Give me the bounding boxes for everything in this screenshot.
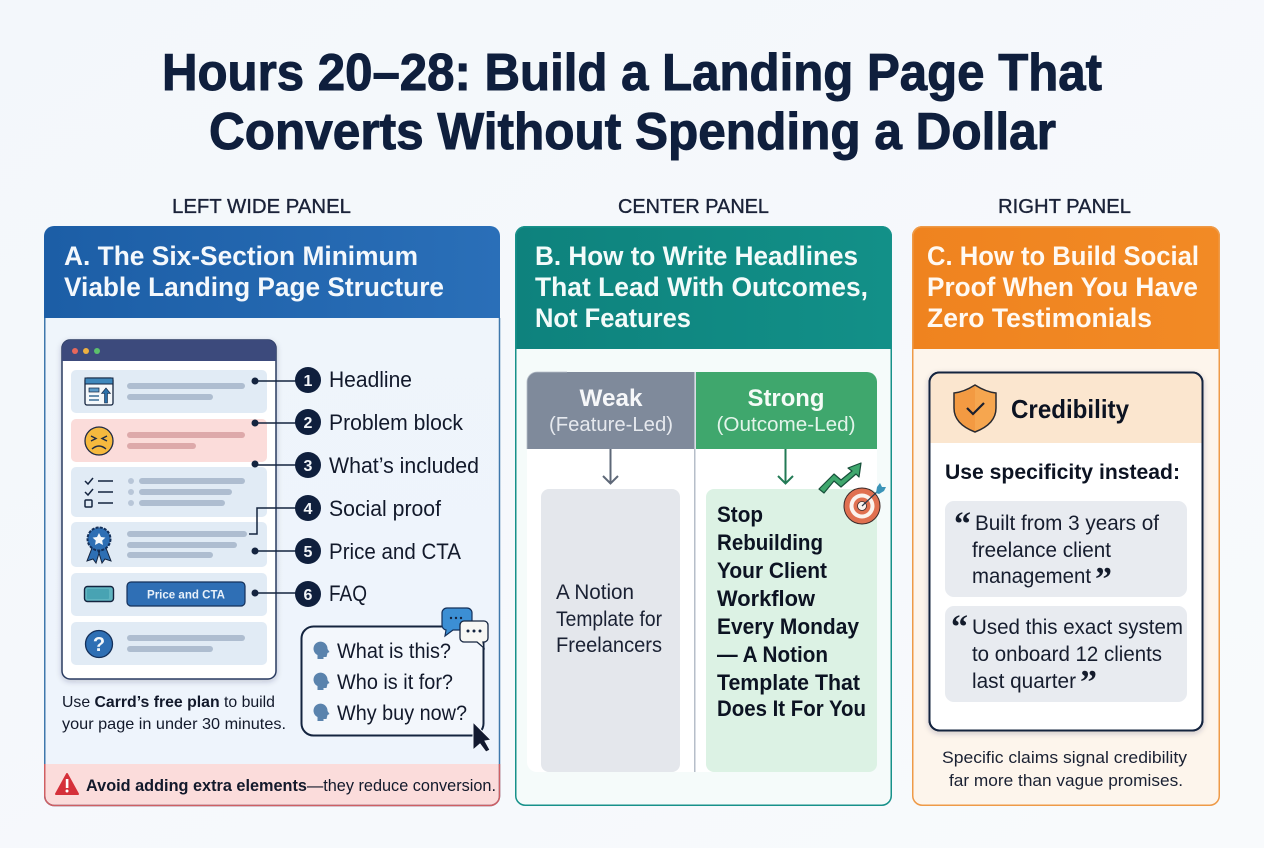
numbered list: 6 [304, 587, 313, 604]
credibility card: Credibility [1011, 394, 1129, 424]
FAQ questions box: Who is it for? [337, 671, 453, 694]
strong headline box [706, 489, 877, 772]
weak headline box [541, 489, 680, 772]
numbered list: What’s included [329, 453, 479, 478]
panel B header [515, 226, 892, 349]
strong headline box: — A Notion [717, 642, 828, 667]
quote 1: “ [954, 506, 971, 543]
numbered list: Problem block [329, 410, 464, 435]
panel A: six-section structure [44, 226, 500, 806]
numbered list: 4 [304, 501, 313, 518]
panel B: headlines [515, 226, 892, 806]
numbered list: Price and CTA [329, 539, 461, 564]
title: Converts Without Spending a Dollar [209, 103, 1056, 161]
FAQ questions box: Why buy now? [337, 702, 467, 725]
label: left wide panel: LEFT WIDE PANEL [172, 196, 351, 218]
strong headline box: Workflow [717, 586, 816, 611]
numbered list: 3 [304, 458, 313, 475]
row 2: problem block [71, 419, 267, 462]
panel C header [912, 226, 1220, 349]
caption: specific claims: Specific claims signal credibility [942, 748, 1188, 767]
quote 1: freelance client [972, 539, 1111, 562]
icon: frustrated face [85, 427, 113, 455]
connector lines [249, 378, 296, 596]
quote 2 [945, 606, 1187, 702]
numbered list: 2 [304, 415, 313, 432]
icon: warning triangle [56, 774, 78, 794]
weak headline box: Template for [556, 608, 662, 631]
numbered list: FAQ [329, 581, 367, 606]
arrow: weak [603, 449, 618, 484]
quote 2: “ [951, 609, 968, 646]
quote 1 [945, 501, 1187, 598]
arrow: strong [778, 449, 793, 484]
quote 2: to onboard 12 clients [972, 643, 1162, 666]
FAQ questions box [302, 608, 491, 752]
icon: shield [954, 385, 996, 432]
panel B header: B. How to Write Headlines [535, 241, 858, 271]
strong headline box: Template That [717, 670, 861, 695]
strong headline box: Rebuilding [717, 530, 823, 555]
icon: speech bubbles [442, 608, 488, 648]
numbered list: 1 [304, 373, 313, 390]
strong column header: Strong [748, 385, 824, 412]
numbered list [295, 367, 479, 607]
panel B header: Not Features [535, 303, 691, 333]
weak column header [527, 372, 694, 449]
numbered list: Headline [329, 367, 412, 392]
FAQ questions box: What is this? [337, 640, 451, 663]
weak column header: (Feature-Led) [549, 414, 673, 436]
caption: Carrd tip: Use Carrd’s free plan to build [62, 694, 275, 711]
panel C header: Zero Testimonials [927, 303, 1152, 333]
label: center panel: CENTER PANEL [618, 196, 769, 218]
quote 1: management [972, 565, 1091, 588]
panel C header: C. How to Build Social [927, 241, 1199, 271]
title [162, 44, 1102, 161]
caption: specific claims [942, 748, 1188, 790]
panel C header: Proof When You Have [927, 272, 1198, 302]
numbered list: Social proof [329, 496, 442, 521]
strong column header [696, 372, 877, 449]
panel A header: A. The Six-Section Minimum [64, 241, 418, 271]
panel C: social proof [912, 226, 1220, 806]
icon: checklist [85, 478, 113, 507]
row 4: social proof [71, 522, 267, 567]
panel A header: Viable Landing Page Structure [64, 272, 444, 302]
strong headline box: Every Monday [717, 614, 860, 639]
warning strip: Avoid adding extra elements—they reduce conversion. [86, 776, 496, 795]
label: right panel: RIGHT PANEL [998, 196, 1131, 218]
comparison table [527, 372, 877, 772]
icon: growth arrow [819, 463, 861, 493]
row 6: FAQ [71, 622, 267, 665]
numbered list: 5 [304, 544, 313, 561]
caption: specific claims: far more than vague promises. [949, 771, 1183, 790]
panel A header [44, 226, 500, 318]
row 1: headline [71, 370, 267, 413]
weak headline box: A Notion [556, 581, 634, 604]
credibility card: Use specificity instead: [945, 461, 1180, 484]
quote 2: Used this exact system [972, 616, 1183, 639]
warning strip [44, 764, 500, 806]
strong headline box: Does It For You [717, 696, 866, 721]
strong headline box: Your Client [717, 558, 828, 583]
row 5: price and CTA [71, 573, 267, 616]
credibility card [930, 372, 1202, 730]
icon: page layout [85, 378, 113, 405]
icon: award ribbon [87, 528, 111, 563]
weak headline box: Freelancers [556, 634, 662, 657]
icons: speaking heads [314, 642, 330, 721]
quote 2: ” [1080, 664, 1097, 701]
quote 1: Built from 3 years of [975, 512, 1159, 535]
caption: Carrd tip [62, 694, 286, 733]
row 3: what's included [71, 467, 267, 517]
strong column header: (Outcome-Led) [716, 414, 856, 436]
caption: Carrd tip: your page in under 30 minutes. [62, 716, 286, 733]
icon: question mark: ? [93, 634, 105, 656]
icon: cursor [473, 722, 491, 752]
panel B header: That Lead With Outcomes, [535, 272, 868, 302]
strong headline box: Stop [717, 502, 763, 527]
icon: target [844, 483, 886, 524]
quote 2: last quarter [972, 670, 1076, 693]
title: Hours 20–28: Build a Landing Page That [162, 44, 1102, 102]
browser mockup [62, 340, 276, 679]
button: Price and CTA [147, 590, 225, 602]
weak column header: Weak [580, 385, 643, 412]
icon: price card [84, 586, 114, 602]
quote 1: ” [1095, 561, 1112, 598]
button [127, 582, 245, 606]
icon: question mark [86, 630, 112, 658]
